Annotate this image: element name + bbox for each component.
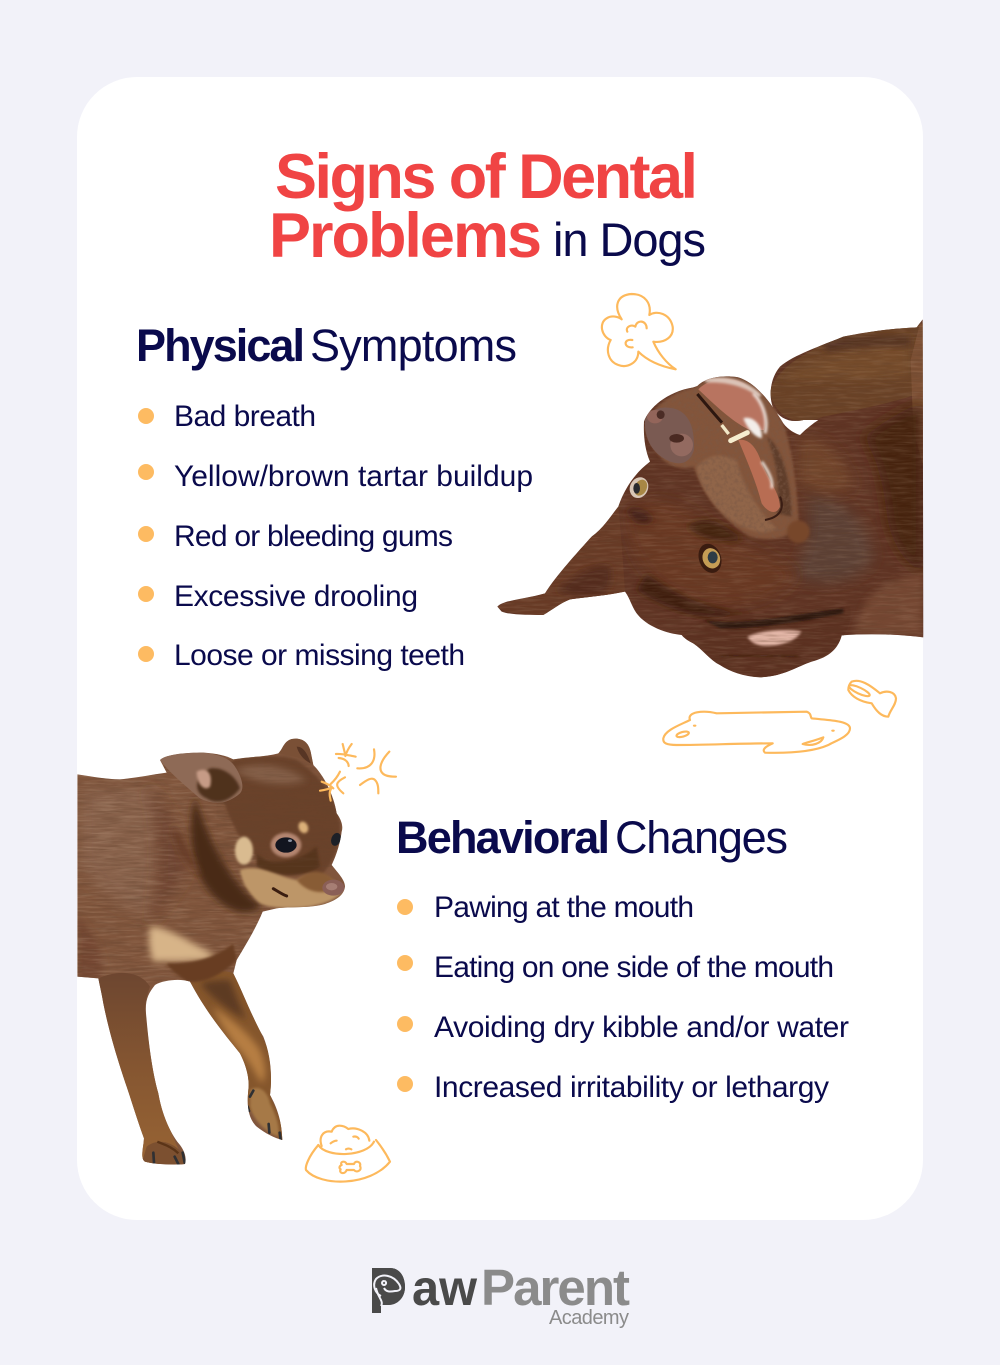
item: drooling: Excessive drooling [174,580,418,613]
upper lip and gums [698,379,765,430]
eye left [630,477,648,498]
bullet [138,464,154,480]
bullet [138,526,154,542]
big ear [160,753,242,803]
tan chest [149,927,217,962]
icon: bad breath cloud [602,294,676,369]
photo: chocolate dog lying upside down [490,313,927,683]
bullet [397,955,413,971]
body sheen [80,788,154,911]
fur grain [490,313,927,683]
list: physical symptoms [138,400,533,672]
logo: PawParent Academy: Academy [549,1307,629,1329]
fur grain body [77,758,263,984]
mouth dark line [697,394,722,423]
item: eating: Eating on one side of the mouth [434,951,834,984]
nose [322,880,344,896]
icon: tooth [848,681,896,717]
item: irritability: Increased irritability or lethargy [434,1071,829,1104]
nose [645,408,694,463]
heading: Behavioral Changes: Changes [615,812,788,863]
title: Problems [269,201,542,271]
mouth [273,889,287,896]
logo: PawParent Academy [370,1257,630,1329]
heading: Physical Symptoms: Symptoms [310,320,517,371]
tongue and open mouth [738,440,780,512]
front leg [190,971,283,1142]
head [220,756,340,877]
muzzle [645,376,798,539]
logo: PawParent Academy: aw [412,1260,477,1316]
bullet [138,646,154,662]
bullet [138,586,154,602]
title: in Dogs [553,213,706,266]
claws back paw [153,1153,185,1164]
fur grain head [265,768,342,866]
brow spot [297,820,310,835]
bullet [138,408,154,424]
ear [497,507,625,615]
heading: Physical Symptoms [136,320,517,371]
list: behavioral changes [397,891,849,1104]
bullet [397,1016,413,1032]
tan cheek and muzzle [235,837,253,865]
teeth [722,425,729,434]
shoulder sheen [796,497,872,583]
eye near [271,833,301,857]
title: Signs of Dental [275,142,698,212]
bullet [397,1076,413,1092]
icon: drool puddle [663,712,850,753]
raised paw [770,323,920,421]
title [269,142,706,271]
folded front paw [685,616,844,678]
heading: Behavioral Changes: Behavioral [396,812,610,863]
icon: food bowl [306,1126,390,1182]
photo: small brown chihuahua [77,738,345,1165]
item: avoiding kibble: Avoiding dry kibble and/or water [434,1011,849,1044]
far ear [278,739,313,765]
dark chest [863,403,923,573]
heading: Behavioral Changes [396,812,788,863]
icon: solid P with dog head: P [370,1257,404,1327]
item: gums: Red or bleeding gums [174,520,453,553]
neck shadow [191,797,262,912]
logo: PawParent Academy: Parent [481,1259,630,1316]
right edge fold [911,323,923,467]
head warm tone [631,508,786,600]
item: pawing: Pawing at the mouth [434,891,694,924]
item: teeth: Loose or missing teeth [174,639,465,672]
item: tartar: Yellow/brown tartar buildup [174,460,533,493]
icon: irritation marks [320,744,396,801]
eye far [331,832,341,846]
eye right [698,544,722,573]
heading: Physical Symptoms: Physical [136,320,305,371]
panel: white card [77,77,923,1220]
back leg [98,973,185,1163]
forehead shadow [687,520,743,541]
claws front paw [248,1091,281,1140]
pink pad [747,630,802,646]
item: bad breath: Bad breath [174,400,316,433]
bullet [397,899,413,915]
